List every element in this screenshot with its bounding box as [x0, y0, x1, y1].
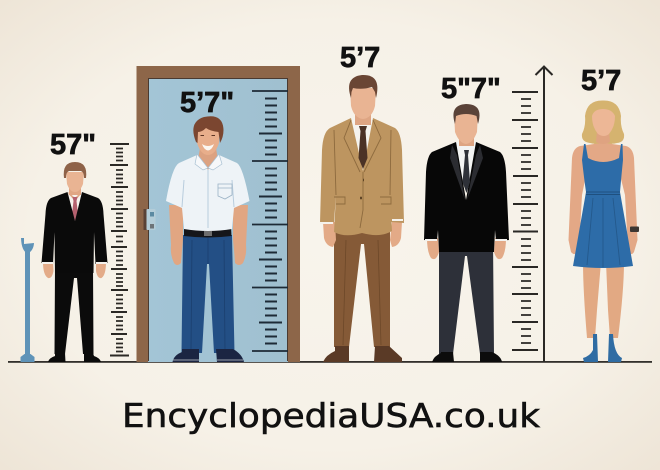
heels	[583, 334, 622, 362]
hands	[427, 238, 506, 259]
person: small man in black suit	[42, 162, 108, 362]
smile	[202, 144, 214, 150]
hands	[323, 222, 402, 247]
trousers	[334, 230, 390, 347]
ruler: door scale	[252, 91, 288, 351]
shirt pocket	[218, 184, 232, 199]
ground line	[8, 361, 652, 363]
dress	[573, 144, 633, 268]
person: man in black tuxedo	[424, 104, 509, 362]
person: tall man in tan jacket	[320, 75, 404, 362]
brand title: EncyclopediaUSA.co.uk	[122, 396, 541, 435]
person: smiling man in white shirt	[166, 116, 250, 362]
black jacket	[424, 142, 509, 252]
shirt	[166, 155, 250, 231]
hands	[43, 262, 106, 278]
trousers	[182, 235, 234, 353]
tie	[358, 126, 368, 169]
door	[136, 66, 300, 362]
buttons	[360, 180, 364, 198]
icon: door latch	[144, 209, 156, 230]
neck and shirt	[66, 190, 84, 222]
shoes	[432, 352, 502, 362]
neck	[596, 130, 610, 144]
trousers	[439, 240, 494, 354]
hair	[582, 100, 624, 144]
label: 5'7 tall man: 5’7	[340, 42, 380, 74]
label: 57": 57"	[50, 129, 96, 161]
label: 5'7" on door: 5’7"	[180, 87, 234, 119]
shoes	[48, 353, 101, 362]
face	[592, 109, 615, 136]
neck	[198, 148, 218, 170]
ruler: axis scale with arrow	[512, 66, 552, 362]
head	[454, 112, 478, 144]
head	[197, 128, 219, 155]
lapels	[450, 145, 483, 200]
legs	[54, 268, 94, 354]
label: 5"7": 5"7"	[441, 73, 501, 105]
ruler: small man	[110, 144, 129, 356]
head	[350, 88, 376, 119]
tie	[462, 150, 470, 193]
arms	[169, 205, 248, 265]
legs	[583, 262, 624, 338]
upper body and arms	[568, 140, 638, 254]
shoes	[323, 346, 402, 362]
label: 5'7 woman: 5’7	[581, 65, 621, 97]
icon: blue cane	[20, 238, 34, 362]
head	[66, 172, 84, 192]
wristwatch	[630, 226, 639, 232]
shirt	[456, 142, 477, 190]
shirt	[352, 118, 373, 165]
shoes	[172, 349, 244, 362]
belt	[184, 227, 232, 238]
arrow	[536, 66, 552, 362]
jacket	[42, 192, 108, 273]
person: woman in blue dress	[568, 100, 639, 362]
tie	[72, 197, 78, 221]
tan jacket	[320, 118, 404, 235]
